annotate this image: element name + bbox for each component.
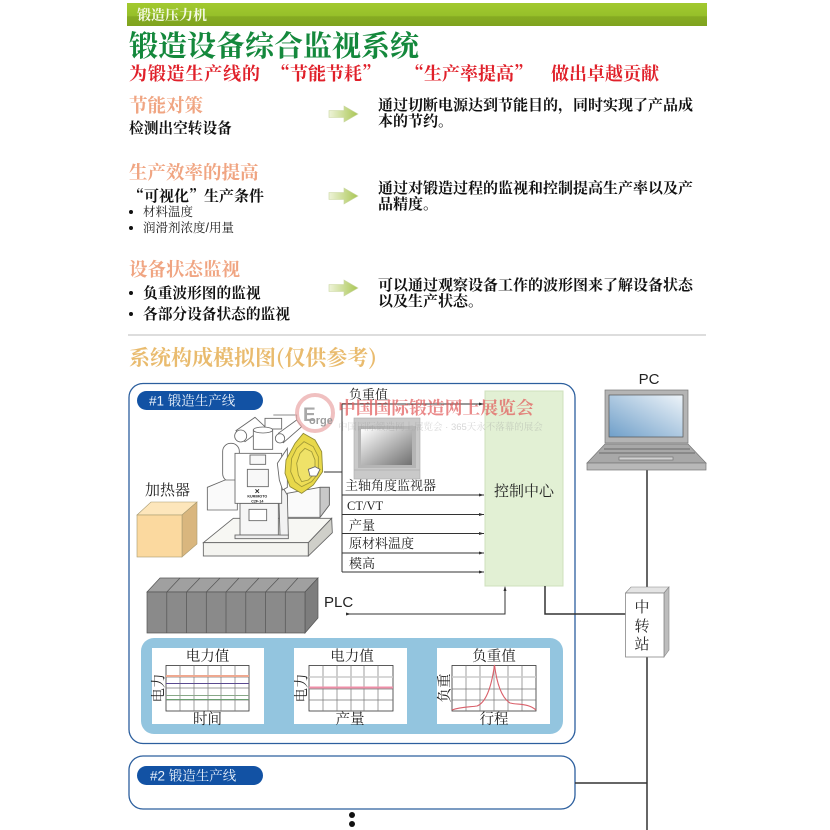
subtitle: “节能节耗” [272, 60, 380, 86]
header bar: 锻造压力机 [137, 7, 207, 23]
chart: power vs time [150, 647, 264, 728]
signal labels: CT/VT [347, 499, 383, 513]
chart: power vs output: 电力值 [330, 647, 374, 665]
description 3 [378, 276, 694, 310]
arrow 1 [329, 106, 358, 122]
signal labels: 原材料温度 [349, 536, 414, 551]
description 3: 可以通过观察设备工作的波形图来了解设备状态 [378, 276, 694, 294]
forging press machine: KURIMOTO [247, 494, 267, 498]
description 2: 通过对锻造过程的监视和控制提高生产率以及产 [378, 179, 693, 197]
chart: power vs output: 产量 [336, 711, 364, 728]
list: conditions: 润滑剂浓度/用量 [143, 220, 234, 235]
PC label: PC [639, 371, 660, 388]
section: equipment status [129, 259, 694, 323]
heater label: 加热器 [145, 481, 190, 499]
list: monitoring: 负重波形图的监视 [143, 284, 261, 302]
pill: line 1: #1 锻造生产线 [149, 392, 236, 408]
signal labels: 产量 [349, 518, 375, 533]
chart: load vs stroke: 行程 [480, 711, 509, 728]
heading: productivity: 生产效率的提高 [129, 162, 259, 183]
description 1: 本的节约。 [378, 110, 453, 131]
PLC label: PLC [324, 594, 353, 611]
forging press machine: ✕ [255, 488, 261, 495]
logo watermark: E [303, 405, 316, 426]
heading: equipment status: 设备状态监视 [129, 259, 241, 280]
pill: line 2: #2 锻造生产线 [150, 768, 237, 784]
header bar [127, 3, 707, 26]
list: conditions [129, 204, 234, 235]
signal labels: 模高 [349, 556, 375, 571]
heater box [137, 502, 197, 557]
text: idle detection: 检测出空转设备 [129, 119, 232, 137]
signal labels: 主轴角度监视器 [345, 478, 436, 493]
section: energy saving [129, 94, 693, 137]
signal labels: 负重值 [349, 387, 388, 402]
heater [137, 481, 197, 557]
chart: power vs output: 电力 [292, 674, 310, 702]
network lines [545, 470, 647, 830]
continuation dots [349, 812, 355, 827]
signal lines [342, 402, 484, 574]
watermark text [338, 397, 543, 433]
forging press machine [203, 415, 332, 556]
arrow 3 [329, 280, 358, 296]
PLC rack [147, 578, 318, 633]
subtitle: “生产率提高” [406, 60, 532, 86]
monitor [354, 418, 420, 479]
watermark text: 中国国际锻造网上展览会 · 365天永不落幕的展会 [338, 421, 543, 433]
text: visualisation: “可视化”生产条件 [129, 185, 264, 206]
chart: power vs time: 时间 [193, 711, 222, 728]
chart: load vs stroke: 负重 [436, 674, 454, 702]
chart: power vs output [292, 647, 407, 728]
list: conditions: 材料温度 [143, 204, 194, 219]
watermark text: 中国国际锻造网上展览会 [338, 397, 534, 418]
PLC connector [346, 586, 506, 616]
pill: line 1 [137, 391, 263, 410]
subtitle: 做出卓越贡献 [551, 60, 660, 86]
subtitle: 为锻造生产线的 [129, 60, 260, 86]
control center [485, 391, 563, 586]
relay station: 转 [634, 618, 650, 635]
panel: line 1 [129, 384, 575, 744]
description 2 [378, 179, 693, 213]
panel: line 2 [129, 756, 575, 809]
description 3: 以及生产状态。 [378, 292, 483, 310]
arrow 2 [329, 188, 358, 204]
chart: load vs stroke [436, 647, 550, 728]
heading: energy saving: 节能对策 [129, 95, 203, 116]
relay station [626, 587, 669, 657]
list: monitoring: 各部分设备状态的监视 [143, 305, 290, 323]
pill: line 2 [137, 766, 263, 785]
relay station: 站 [634, 636, 650, 653]
connector: machine to lines [324, 471, 342, 473]
subtitle [129, 60, 660, 86]
control center: 控制中心 [494, 483, 555, 500]
chart: power vs time: 电力值 [186, 647, 230, 665]
heading: system diagram: 系统构成模拟图(仅供参考) [129, 342, 377, 372]
description 1 [378, 94, 693, 131]
chart: power vs time: 电力 [150, 674, 168, 702]
laptop [587, 390, 706, 470]
forging press machine: C2F-14 [251, 499, 264, 503]
list: monitoring [129, 284, 290, 323]
section: productivity [129, 162, 693, 235]
logo watermark [297, 395, 333, 431]
description 1: 通过切断电源达到节能目的，同时实现了产品成 [378, 94, 693, 115]
chart: load vs stroke: 负重值 [472, 647, 516, 665]
logo watermark: orge [309, 415, 333, 427]
title: 锻造设备综合监视系统 [129, 30, 421, 63]
panel: charts [141, 638, 563, 734]
description 2: 品精度。 [378, 195, 438, 213]
relay station: 中 [634, 599, 650, 616]
signal labels [345, 387, 436, 571]
